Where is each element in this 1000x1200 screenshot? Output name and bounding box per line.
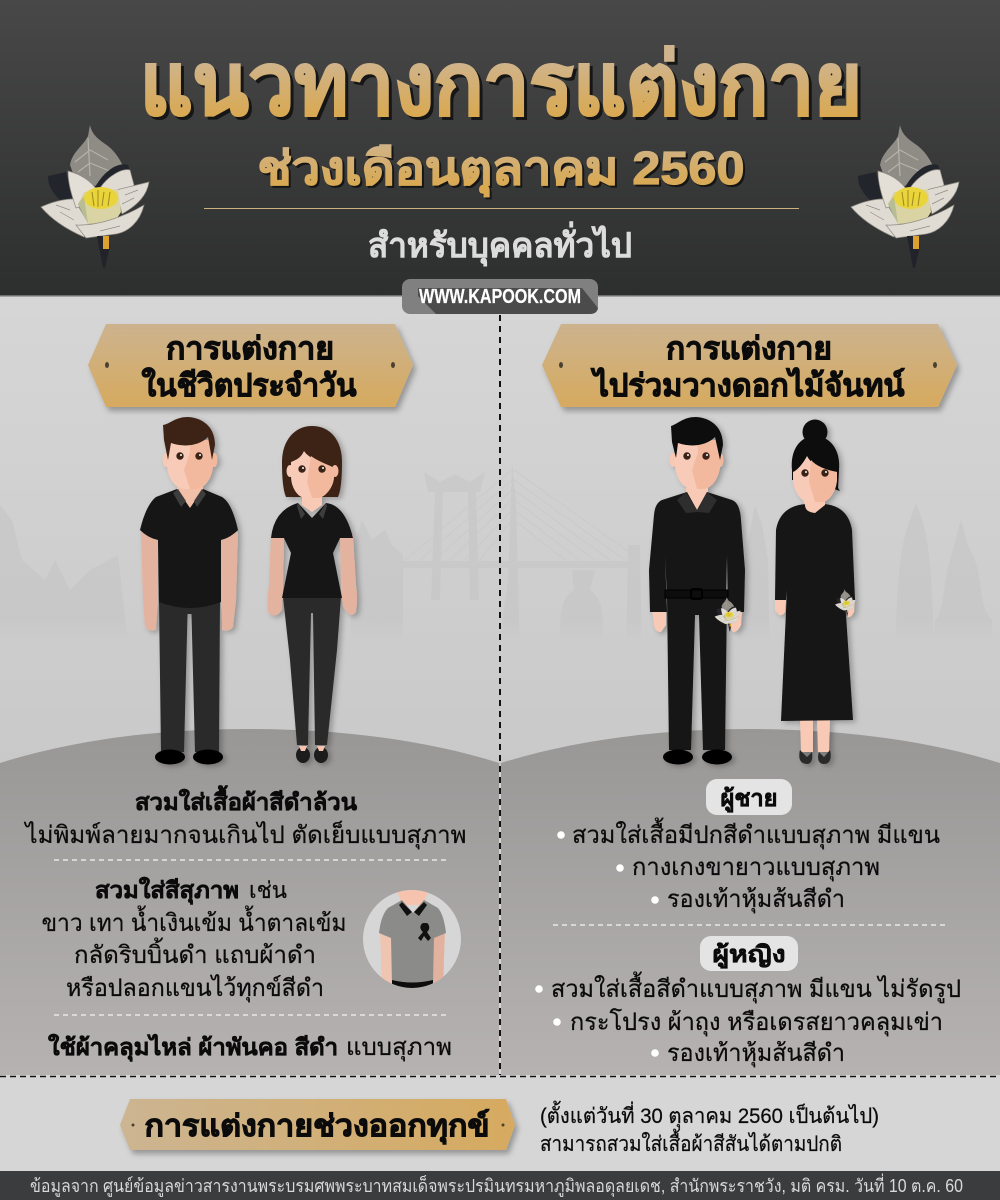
figure: casual woman xyxy=(268,426,357,763)
text block: daily life: สวมใส่เสื้อผ้าสีดำล้วน xyxy=(135,785,357,815)
text block: daily life: ไม่พิมพ์ลายมากจนเกินไป ตัดเย็บแบบสุภาพ xyxy=(23,820,466,850)
text block: daily life: แบบสุภาพ xyxy=(346,1034,452,1062)
website tag xyxy=(402,279,598,314)
icon: flower in man's hand xyxy=(715,597,741,631)
banner: daily life xyxy=(88,324,413,407)
figure: casual man xyxy=(140,417,238,764)
label pill: women xyxy=(700,936,798,971)
title: แนวทางการแต่งกาย xyxy=(140,37,862,133)
note: end of mourning: (ตั้งแต่วันที่ 30 ตุลาคม 2560 เป็นต้นไป) xyxy=(540,1101,879,1129)
text block: women: กระโปรง ผ้าถุง หรือเดรสยาวคลุมเข่า xyxy=(570,1008,943,1037)
text block: women xyxy=(535,936,961,1068)
footer xyxy=(0,1171,1000,1200)
ground: right xyxy=(501,729,1000,1075)
figure: formal man xyxy=(649,417,745,764)
text block: daily life: สวมใส่สีสุภาพ xyxy=(95,876,239,905)
header band xyxy=(0,0,1000,296)
note: end of mourning: สามารถสวมใส่เสื้อผ้าสีสันได้ตามปกติ xyxy=(540,1129,842,1156)
note: end of mourning xyxy=(540,1101,879,1156)
label pill: women: ผู้หญิง xyxy=(712,941,786,969)
text block: women: รองเท้าหุ้มส้นสีดำ xyxy=(667,1040,845,1068)
skyline: bridge cables xyxy=(405,470,640,560)
banner: end of mourning xyxy=(120,1099,515,1150)
text block: men: รองเท้าหุ้มส้นสีดำ xyxy=(667,886,845,914)
website tag: WWW.KAPOOK.COM xyxy=(419,286,581,308)
bottom divider xyxy=(0,1076,1000,1078)
text block: daily life xyxy=(23,785,466,1062)
icon: right flower xyxy=(851,125,959,268)
text block: men: กางเกงขายาวแบบสุภาพ xyxy=(632,854,880,882)
audience line: สำหรับบุคคลทั่วไป xyxy=(368,221,632,267)
subtitle: ช่วงเดือนตุลาคม 2560 xyxy=(260,144,746,199)
text block: daily life: เช่น xyxy=(249,877,287,903)
banner: end of mourning: การแต่งกายช่วงออกทุกข์ xyxy=(144,1109,490,1145)
centre divider xyxy=(499,315,501,1075)
figure: formal woman xyxy=(775,420,855,764)
icon: flower in woman's hand xyxy=(835,589,856,616)
title: แนวทางการแต่งกาย xyxy=(143,40,865,136)
ground: left xyxy=(0,729,499,1075)
text block: daily life: กลัดริบบิ้นดำ แถบผ้าดำ xyxy=(74,937,316,969)
text block: women: สวมใส่เสื้อสีดำแบบสุภาพ มีแขน ไม่รัดรูป xyxy=(551,971,961,1004)
text block: men: สวมใส่เสื้อมีปกสีดำแบบสุภาพ มีแขน xyxy=(572,817,940,850)
text block: daily life: ใช้ผ้าคลุมไหล่ ผ้าพันคอ สีดำ xyxy=(48,1033,338,1062)
label pill: men xyxy=(706,779,792,815)
text block: daily life: ขาว เทา น้ำเงินเข้ม น้ำตาลเข้ม xyxy=(42,905,346,937)
text block: men xyxy=(553,779,945,925)
label pill: men: ผู้ชาย xyxy=(720,785,778,813)
banner: flower laying: ไปร่วมวางดอกไม้จันทน์ xyxy=(591,367,905,403)
banner: daily life: การแต่งกาย xyxy=(166,331,334,366)
banner: daily life: ในชีวิตประจำวัน xyxy=(142,367,356,403)
icon: grey polo with black ribbon xyxy=(363,888,461,990)
banner: flower laying xyxy=(542,324,957,407)
banner: flower laying: การแต่งกาย xyxy=(666,331,832,366)
page background xyxy=(0,296,1000,766)
skyline silhouette xyxy=(0,463,992,660)
subtitle: ช่วงเดือนตุลาคม 2560 xyxy=(258,142,744,197)
icon: left flower xyxy=(41,125,149,268)
text block: daily life: หรือปลอกแขนไว้ทุกข์สีดำ xyxy=(66,974,324,1003)
